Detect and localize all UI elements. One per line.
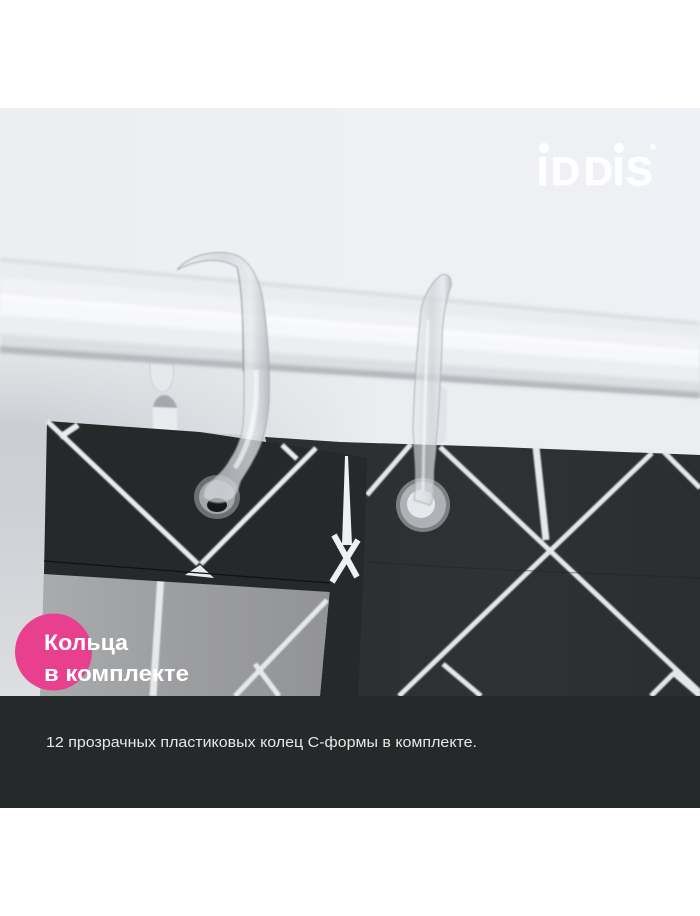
callout badge: pink circle — [15, 614, 92, 690]
text block: caption: 12 прозрачных пластиковых колец С-формы в комплекте. — [46, 734, 477, 751]
icon: rear ring drip — [150, 362, 177, 431]
icon: eyelet, rear curtain — [396, 478, 450, 532]
icon: C-ring, front curtain — [177, 253, 269, 503]
wall background — [0, 108, 700, 696]
seam — [368, 562, 700, 578]
curtain pattern lines — [367, 444, 700, 696]
stitching — [44, 561, 330, 583]
curtain: side fold strip — [320, 453, 367, 696]
rod: front rail — [0, 258, 700, 398]
panel: dark caption bar — [0, 696, 700, 808]
icon: C-ring, rear curtain — [413, 274, 451, 505]
rear curtain rod — [0, 353, 700, 456]
panel: product photo — [0, 108, 700, 696]
curtain: black hem — [44, 421, 340, 592]
heading: rings included: Кольца — [44, 630, 129, 655]
heading: rings included: в комплекте — [44, 661, 189, 686]
shadowed wall below rod — [0, 345, 700, 696]
logo: IDDIS: IDDIS — [537, 150, 653, 194]
icon: eyelet, front curtain — [194, 475, 240, 519]
curtain: back panel — [265, 437, 700, 696]
curtain: grey folded-over section — [40, 570, 330, 696]
